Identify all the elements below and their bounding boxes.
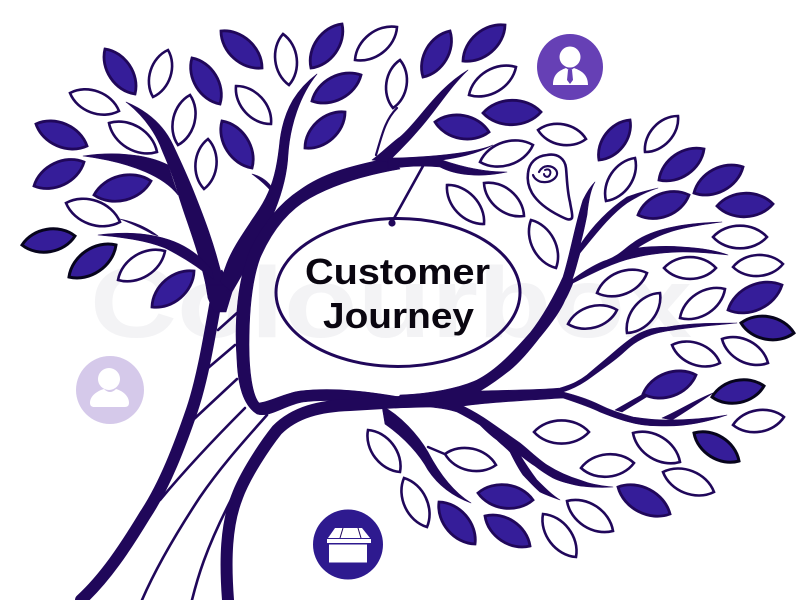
sign ellipse bbox=[276, 218, 520, 366]
lower branch bbox=[382, 406, 471, 503]
leaves: top crown bbox=[213, 16, 588, 273]
trunk junction bbox=[205, 270, 232, 312]
right crown branches bbox=[395, 182, 737, 500]
icon: store badge bbox=[313, 510, 383, 580]
trunk inner lines bbox=[142, 240, 267, 600]
upper branch to top right bbox=[372, 70, 468, 162]
forked branch tips bbox=[388, 145, 507, 175]
title: Customer Journey bbox=[305, 251, 490, 336]
left trunk bbox=[81, 300, 216, 600]
small twig bbox=[252, 174, 273, 191]
left crown main branch bbox=[126, 102, 224, 285]
leaves: right crown bbox=[565, 109, 796, 436]
leaves: left crown bbox=[20, 43, 262, 316]
icon: person badge bbox=[76, 356, 144, 424]
arch around the sign bbox=[236, 157, 400, 415]
leaves: lower crown bbox=[359, 420, 745, 564]
watermark text: Colourbox bbox=[90, 247, 692, 359]
icon: ear-shaped bulb bbox=[528, 155, 572, 219]
title: Customer Journey: Journey bbox=[323, 295, 474, 336]
lower arch trunk bbox=[227, 402, 400, 600]
right crown twigs bbox=[615, 393, 713, 420]
tree: trunks and branches bbox=[81, 70, 737, 600]
lower leaf twig bbox=[428, 447, 447, 455]
left crown side branch lower bbox=[98, 233, 214, 280]
central branch bbox=[220, 74, 317, 292]
left crown side branch upper bbox=[83, 154, 178, 195]
thin twig to leaf bbox=[376, 108, 397, 155]
title: Customer Journey: Customer bbox=[305, 251, 490, 292]
left crown twig bbox=[120, 219, 158, 236]
hanging line and nail bbox=[388, 166, 423, 227]
icon: businessman badge bbox=[537, 34, 603, 100]
